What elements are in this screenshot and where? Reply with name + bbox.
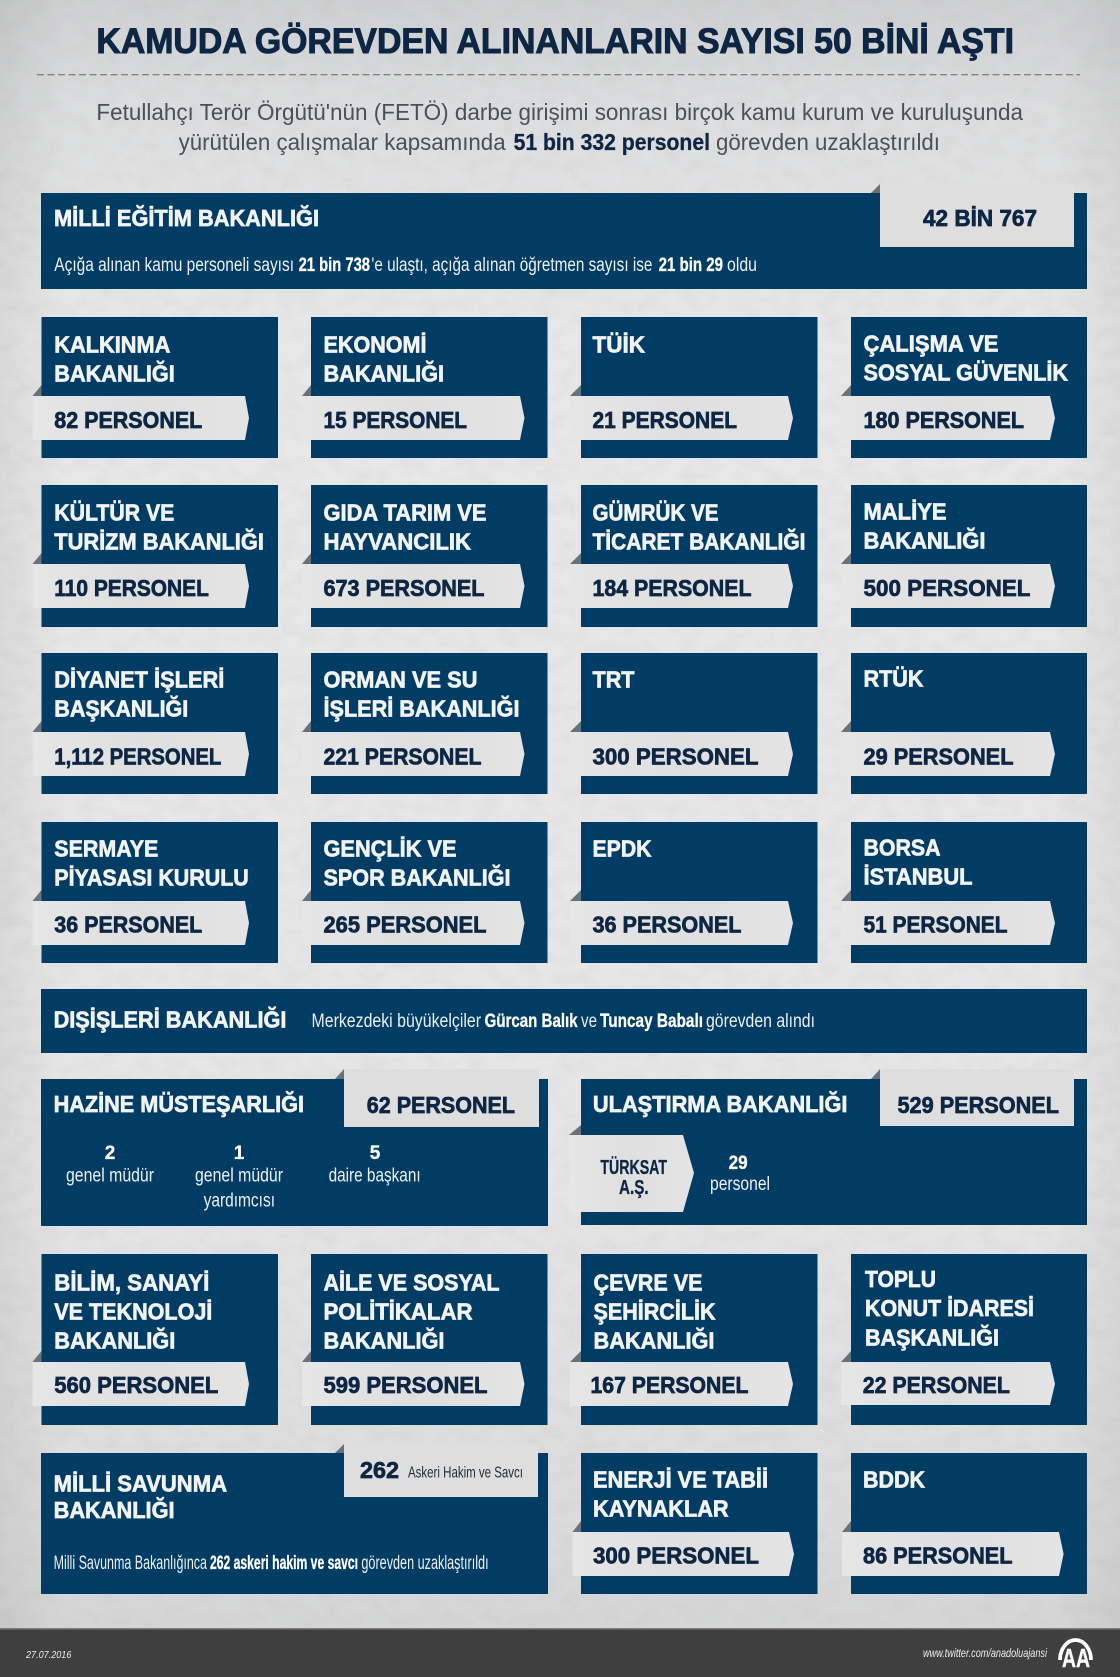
card: Enerji ve Tabii Kaynaklar: 300 PERSONEL xyxy=(593,1542,759,1568)
panel: Milli Eğitim Bakanlığı: 21 bin 29 xyxy=(659,255,723,276)
card: Toplu Konut İdaresi Başkanlığı: BAŞKANLIĞI xyxy=(865,1324,999,1350)
card: RTÜK xyxy=(841,653,1087,794)
panel: Milli Eğitim Bakanlığı xyxy=(41,184,1087,289)
card: Ekonomi Bakanlığı: 15 PERSONEL xyxy=(324,407,467,433)
card: Çalışma ve Sosyal Güvenlik xyxy=(841,317,1087,458)
card: Enerji ve Tabii Kaynaklar: ENERJİ VE TABİİ xyxy=(593,1466,768,1492)
card: Maliye Bakanlığı: 500 PERSONEL xyxy=(864,575,1030,601)
panel: Dışişleri Bakanlığı: Merkezdeki büyükelçiler xyxy=(312,1011,482,1032)
card: Borsa İstanbul: BORSA xyxy=(864,834,940,860)
card: Enerji ve Tabii Kaynaklar xyxy=(572,1453,818,1594)
panel: Milli Savunma Bakanlığı: 262 askeri hakim ve savcı xyxy=(210,1553,358,1574)
subtitle: Fetullahçı Terör Örgütü'nün (FETÖ) darbe girişimi sonrası birçok kamu kurum ve kuruluşunda xyxy=(96,99,1023,125)
card: Toplu Konut İdaresi Başkanlığı: 22 PERSONEL xyxy=(863,1372,1010,1398)
card: Maliye Bakanlığı xyxy=(841,485,1087,627)
card: Gümrük ve Ticaret Bakanlığı: 184 PERSONEL xyxy=(592,575,752,601)
panel: Milli Eğitim Bakanlığı: 21 bin 738 xyxy=(299,255,370,276)
panel: Milli Savunma Bakanlığı: MİLLİ SAVUNMA xyxy=(54,1470,227,1496)
panel: Ulaştırma Bakanlığı: A.Ş. xyxy=(619,1177,649,1199)
panel: Milli Eğitim Bakanlığı: 'e ulaştı, açığa alınan öğretmen sayısı ise xyxy=(371,255,652,276)
panel: Dışişleri Bakanlığı: ve xyxy=(581,1011,597,1032)
card: Kültür ve Turizm Bakanlığı: TURİZM BAKANLIĞI xyxy=(54,528,264,554)
card: Orman ve Su İşleri Bakanlığı: İŞLERİ BAKANLIĞI xyxy=(324,694,520,722)
card: Enerji ve Tabii Kaynaklar: KAYNAKLAR xyxy=(593,1496,729,1522)
panel: Hazine Müsteşarlığı: yardımcısı xyxy=(204,1191,275,1212)
panel: Hazine Müsteşarlığı: genel müdür xyxy=(66,1166,155,1187)
panel: Hazine Müsteşarlığı xyxy=(41,1069,548,1226)
card: Aile ve Sosyal Politikalar Bakanlığı xyxy=(302,1254,548,1425)
card: Toplu Konut İdaresi Başkanlığı: KONUT İDARESİ xyxy=(865,1295,1034,1321)
card: BDDK: BDDK xyxy=(863,1466,925,1492)
panel: Milli Eğitim Bakanlığı: oldu xyxy=(727,255,757,276)
panel: Hazine Müsteşarlığı: 5 xyxy=(370,1143,381,1164)
card: TRT: 300 PERSONEL xyxy=(592,744,758,770)
card: TÜİK xyxy=(570,317,818,458)
panel: Hazine Müsteşarlığı: 2 xyxy=(105,1143,115,1164)
card: Maliye Bakanlığı: BAKANLIĞI xyxy=(864,526,986,554)
card: EPDK: EPDK xyxy=(592,836,652,862)
footer bar xyxy=(0,1628,1120,1677)
card: Gümrük ve Ticaret Bakanlığı: TİCARET BAKANLIĞI xyxy=(592,528,806,554)
card: Çevre ve Şehircilik Bakanlığı: 167 PERSONEL xyxy=(590,1372,748,1398)
card: Kalkınma Bakanlığı xyxy=(32,317,278,458)
card: Orman ve Su İşleri Bakanlığı: 221 PERSONEL xyxy=(324,744,482,770)
panel: Dışişleri Bakanlığı: Tuncay Babalı xyxy=(600,1011,703,1032)
card: Aile ve Sosyal Politikalar Bakanlığı: BAKANLIĞI xyxy=(324,1326,444,1354)
card: Gıda Tarım ve Hayvancılık: HAYVANCILIK xyxy=(324,528,471,554)
card: Orman ve Su İşleri Bakanlığı xyxy=(302,653,548,794)
card: Borsa İstanbul xyxy=(841,822,1087,963)
panel: Ulaştırma Bakanlığı: personel xyxy=(710,1174,770,1195)
card: TÜİK: 21 PERSONEL xyxy=(592,407,737,433)
card: BDDK: 86 PERSONEL xyxy=(863,1542,1012,1568)
panel: Dışişleri Bakanlığı xyxy=(41,989,1087,1053)
subtitle: yürütülen çalışmalar kapsamında xyxy=(179,129,506,155)
panel: Milli Savunma Bakanlığı: BAKANLIĞI xyxy=(54,1496,175,1523)
card: Bilim, Sanayi ve Teknoloji Bakanlığı: BİLİM, SANAYİ xyxy=(54,1270,209,1296)
card: Kalkınma Bakanlığı: BAKANLIĞI xyxy=(54,360,175,386)
card: Diyanet İşleri Başkanlığı xyxy=(32,653,278,794)
card: Çalışma ve Sosyal Güvenlik: ÇALIŞMA VE xyxy=(864,330,998,356)
card: RTÜK: 29 PERSONEL xyxy=(864,744,1014,770)
panel: Milli Savunma Bakanlığı: 262 xyxy=(360,1457,399,1483)
card: Maliye Bakanlığı: MALİYE xyxy=(864,498,946,524)
panel: Hazine Müsteşarlığı: 1 xyxy=(234,1143,245,1164)
panel: Milli Eğitim Bakanlığı: Açığa alınan kamu personeli sayısı xyxy=(54,255,294,276)
card: Orman ve Su İşleri Bakanlığı: ORMAN VE SU xyxy=(324,666,478,692)
card: BDDK xyxy=(842,1453,1087,1594)
card: Gençlik ve Spor Bakanlığı: SPOR BAKANLIĞI xyxy=(324,864,510,890)
card: Gençlik ve Spor Bakanlığı xyxy=(302,822,548,963)
card: Sermaye Piyasası Kurulu: 36 PERSONEL xyxy=(54,912,202,938)
card: Bilim, Sanayi ve Teknoloji Bakanlığı: 560 PERSONEL xyxy=(54,1372,218,1398)
card: Kalkınma Bakanlığı: KALKINMA xyxy=(54,332,170,358)
card: Kalkınma Bakanlığı: 82 PERSONEL xyxy=(54,407,202,433)
panel: Dışişleri Bakanlığı: Gürcan Balık xyxy=(485,1011,578,1032)
card: Gıda Tarım ve Hayvancılık: 673 PERSONEL xyxy=(324,575,484,601)
card: Gençlik ve Spor Bakanlığı: 265 PERSONEL xyxy=(324,912,486,938)
card: Aile ve Sosyal Politikalar Bakanlığı: 599 PERSONEL xyxy=(324,1372,488,1398)
card: Kültür ve Turizm Bakanlığı: 110 PERSONEL xyxy=(54,575,209,601)
card: Ekonomi Bakanlığı: BAKANLIĞI xyxy=(324,360,444,386)
icon: AA logo xyxy=(1060,1640,1091,1673)
panel: Ulaştırma Bakanlığı: 529 PERSONEL xyxy=(898,1092,1059,1118)
card: TÜİK: TÜİK xyxy=(592,332,645,358)
card: Toplu Konut İdaresi Başkanlığı: TOPLU xyxy=(865,1266,936,1292)
panel: Hazine Müsteşarlığı: genel müdür xyxy=(195,1166,284,1187)
card: Çalışma ve Sosyal Güvenlik: 180 PERSONEL xyxy=(864,407,1024,433)
card: Diyanet İşleri Başkanlığı: 1,112 PERSONEL xyxy=(54,744,221,770)
panel: Dışişleri Bakanlığı: görevden alındı xyxy=(706,1011,815,1032)
card: Gıda Tarım ve Hayvancılık xyxy=(302,485,548,627)
panel: Ulaştırma Bakanlığı: 29 xyxy=(729,1153,748,1174)
card: Çalışma ve Sosyal Güvenlik: SOSYAL GÜVENLİK xyxy=(864,360,1068,386)
card: Aile ve Sosyal Politikalar Bakanlığı: POLİTİKALAR xyxy=(324,1298,473,1324)
panel: Dışişleri Bakanlığı: DIŞİŞLERİ BAKANLIĞI xyxy=(54,1006,286,1032)
card: Çevre ve Şehircilik Bakanlığı: BAKANLIĞI xyxy=(594,1326,714,1354)
date: 27.07.2016 xyxy=(25,1650,72,1661)
subtitle xyxy=(96,99,1023,155)
card: Borsa İstanbul: 51 PERSONEL xyxy=(864,912,1008,938)
card: RTÜK: RTÜK xyxy=(864,666,924,692)
card: Aile ve Sosyal Politikalar Bakanlığı: AİLE VE SOSYAL xyxy=(324,1270,500,1296)
icon: AA logo: AA xyxy=(1062,1643,1090,1673)
social link: www.twitter.com/anadoluajansi xyxy=(923,1646,1047,1660)
card: Çevre ve Şehircilik Bakanlığı: ŞEHİRCİLİK xyxy=(594,1298,716,1324)
panel: Ulaştırma Bakanlığı xyxy=(569,1069,1087,1225)
card: Toplu Konut İdaresi Başkanlığı xyxy=(841,1254,1087,1425)
panel: Milli Eğitim Bakanlığı: MİLLİ EĞİTİM BAKANLIĞI xyxy=(54,204,319,231)
card: Kültür ve Turizm Bakanlığı: KÜLTÜR VE xyxy=(54,500,174,526)
card: Ekonomi Bakanlığı xyxy=(302,317,548,458)
card: Gençlik ve Spor Bakanlığı: GENÇLİK VE xyxy=(324,836,456,862)
card: Bilim, Sanayi ve Teknoloji Bakanlığı: BAKANLIĞI xyxy=(54,1326,175,1354)
card: Kültür ve Turizm Bakanlığı xyxy=(32,485,278,627)
panel: Hazine Müsteşarlığı: daire başkanı xyxy=(329,1166,421,1187)
card: Diyanet İşleri Başkanlığı: BAŞKANLIĞI xyxy=(54,694,188,722)
card: Sermaye Piyasası Kurulu: SERMAYE xyxy=(54,836,158,862)
panel: Milli Savunma Bakanlığı: görevden uzaklaştırıldı xyxy=(361,1553,489,1574)
title: KAMUDA GÖREVDEN ALINANLARIN SAYISI 50 BİNİ AŞTI xyxy=(96,22,1014,61)
card: EPDK: 36 PERSONEL xyxy=(592,912,742,938)
card: TRT xyxy=(570,653,818,794)
panel: Hazine Müsteşarlığı: 62 PERSONEL xyxy=(367,1092,515,1118)
panel: Ulaştırma Bakanlığı: ULAŞTIRMA BAKANLIĞI xyxy=(593,1090,848,1117)
subtitle: 51 bin 332 personel xyxy=(514,129,710,155)
card: Sermaye Piyasası Kurulu: PİYASASI KURULU xyxy=(54,864,249,890)
subtitle: görevden uzaklaştırıldı xyxy=(716,129,940,155)
panel: Hazine Müsteşarlığı: HAZİNE MÜSTEŞARLIĞI xyxy=(54,1090,304,1117)
card: Gümrük ve Ticaret Bakanlığı xyxy=(570,485,818,627)
panel: Milli Savunma Bakanlığı xyxy=(41,1444,548,1594)
panel: Milli Eğitim Bakanlığı: 42 BİN 767 xyxy=(923,205,1037,231)
card: Çevre ve Şehircilik Bakanlığı: ÇEVRE VE xyxy=(594,1270,702,1296)
card: Bilim, Sanayi ve Teknoloji Bakanlığı: VE TEKNOLOJİ xyxy=(54,1298,212,1324)
card: Sermaye Piyasası Kurulu xyxy=(32,822,278,963)
card: Gıda Tarım ve Hayvancılık: GIDA TARIM VE xyxy=(324,500,486,526)
panel: Ulaştırma Bakanlığı: TÜRKSAT xyxy=(600,1156,667,1179)
panel: Milli Savunma Bakanlığı: Askeri Hakim ve Savcı xyxy=(408,1464,523,1482)
card: Gümrük ve Ticaret Bakanlığı: GÜMRÜK VE xyxy=(592,500,718,526)
card: EPDK xyxy=(570,822,818,963)
card: Ekonomi Bakanlığı: EKONOMİ xyxy=(324,332,426,358)
card: Borsa İstanbul: İSTANBUL xyxy=(864,864,972,890)
panel: Milli Savunma Bakanlığı: Milli Savunma Bakanlığınca xyxy=(54,1553,207,1574)
card: Bilim, Sanayi ve Teknoloji Bakanlığı xyxy=(32,1254,278,1425)
card: Çevre ve Şehircilik Bakanlığı xyxy=(570,1254,818,1425)
card: Diyanet İşleri Başkanlığı: DİYANET İŞLERİ xyxy=(54,666,224,692)
card: TRT: TRT xyxy=(592,666,634,692)
